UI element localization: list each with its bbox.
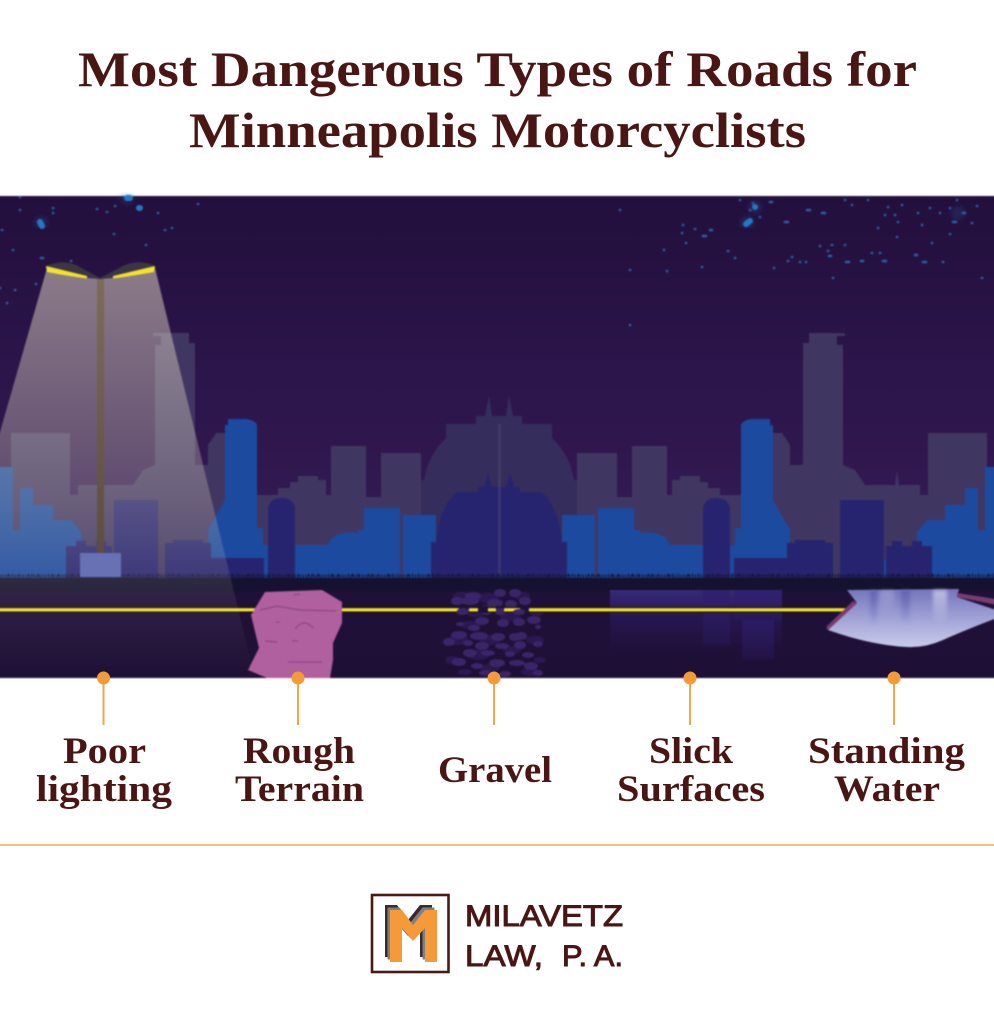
street lamp [0, 262, 255, 678]
night sky [0, 196, 994, 581]
label: slick surfaces: Surfaces [617, 769, 765, 810]
label: slick surfaces [617, 672, 765, 810]
road surface [0, 585, 994, 678]
label: rough terrain: Rough [243, 731, 355, 772]
pin [684, 672, 696, 725]
label: gravel [438, 672, 552, 791]
rough terrain patch [248, 590, 342, 678]
lamp head [46, 262, 155, 279]
label: rough terrain: Terrain [235, 769, 364, 810]
label: gravel: Gravel [438, 750, 552, 791]
title: Most Dangerous Types of Roads for [78, 41, 917, 97]
logo mark [372, 895, 448, 972]
label: standing water: Standing [808, 731, 966, 772]
gravel stones [443, 589, 543, 677]
label: poor lighting: Poor [63, 731, 146, 772]
grass strip [0, 575, 994, 591]
label: slick surfaces: Slick [649, 731, 733, 772]
gravel over centre line [457, 606, 529, 615]
city skyline, left half [0, 333, 501, 580]
title [78, 41, 917, 158]
road centre line [0, 607, 848, 612]
panel: night road scene [0, 196, 994, 678]
slick surface reflection [610, 590, 782, 659]
light beam [0, 268, 255, 678]
logo wordmark: P. A. [562, 940, 623, 973]
gravel shadow stones [445, 592, 546, 676]
lamp lights [46, 266, 155, 278]
city skyline, right half [497, 333, 994, 580]
logo wordmark: MILAVETZ [465, 900, 623, 933]
pin [292, 672, 304, 725]
stars [0, 197, 982, 325]
logo wordmark: LAW, [465, 940, 543, 973]
standing water [826, 589, 994, 647]
white area below scene [0, 679, 994, 845]
lamp pole [97, 278, 104, 553]
lamp base [80, 553, 121, 577]
label: standing water [808, 672, 966, 810]
pin [97, 672, 110, 725]
label: standing water: Water [834, 769, 940, 810]
label: rough terrain [235, 672, 364, 810]
pin [888, 672, 900, 725]
pin [488, 672, 500, 725]
logo: Milavetz Law [372, 895, 623, 973]
label: poor lighting [36, 672, 173, 810]
gravel patch [443, 589, 546, 677]
label: poor lighting: lighting [36, 769, 173, 810]
title: Minneapolis Motorcyclists [189, 102, 806, 158]
